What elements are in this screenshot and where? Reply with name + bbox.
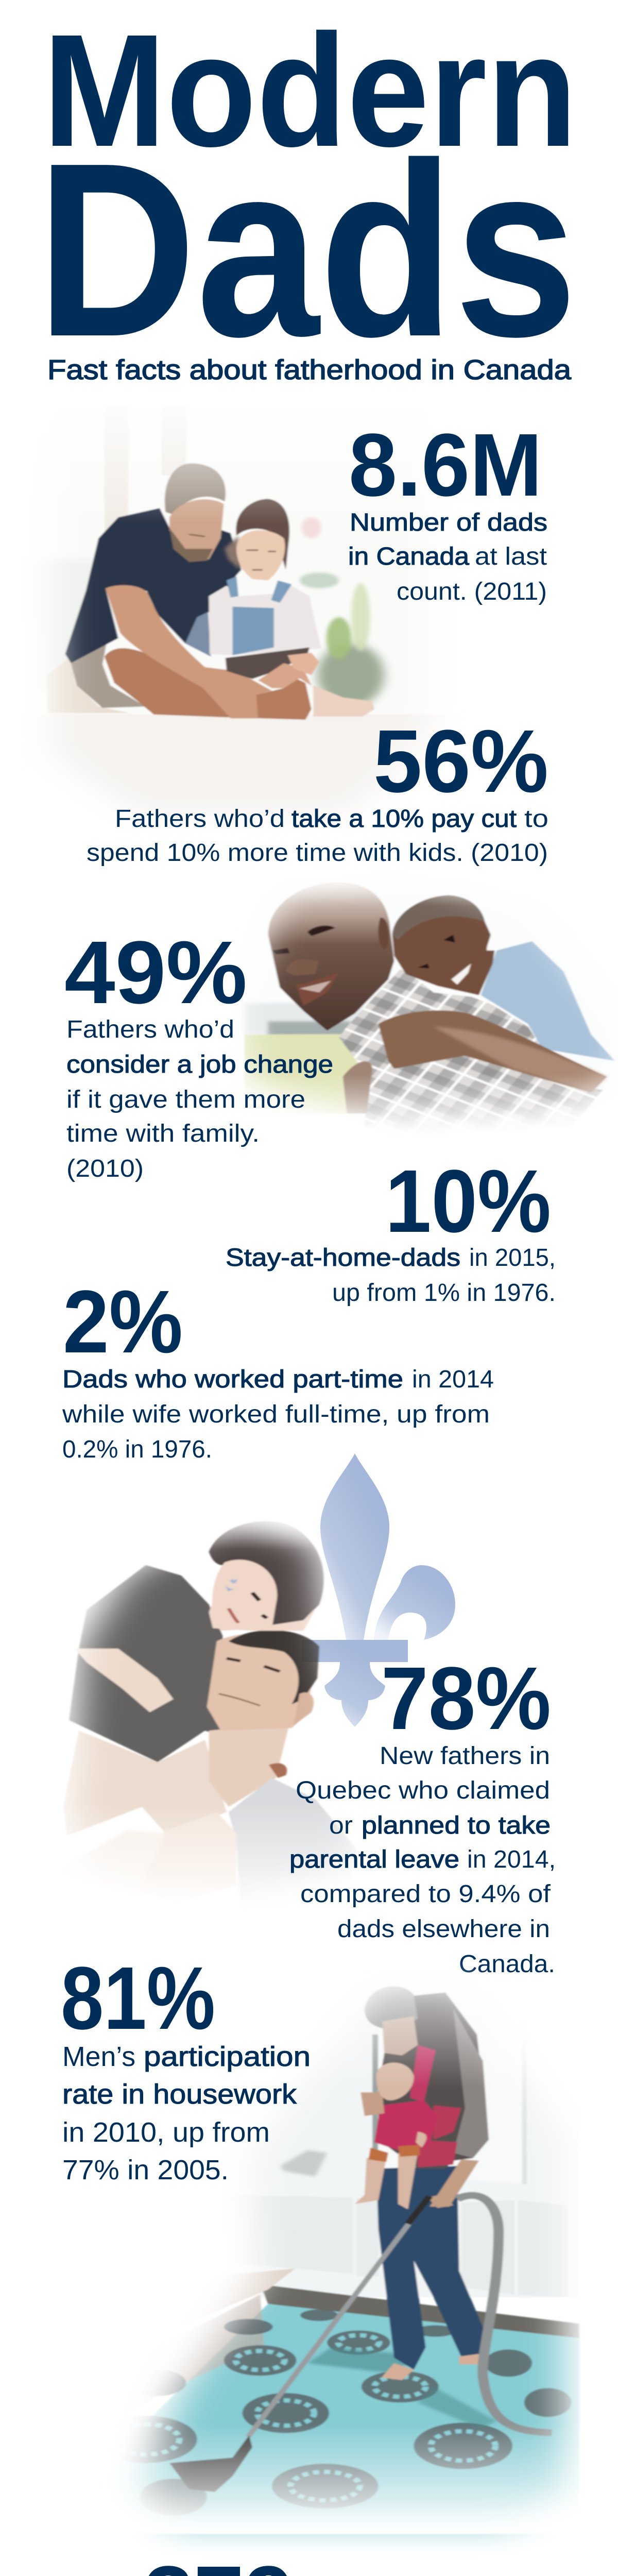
stat: 56% pay cut: 56% (373, 711, 548, 811)
stat: 2% part-time: in 2014 (412, 1366, 494, 1393)
stat: 10% stay-at-home: up from 1% in 1976. (332, 1279, 556, 1307)
stat: 8.6M dads: in Canada (348, 543, 469, 570)
photo: father and daughter with tablet (47, 430, 426, 811)
stat: 78% parental leave: or (329, 1812, 353, 1839)
stat: 8.6M dads: count. (2011) (397, 578, 547, 605)
stat: 49% job change: time with family. (66, 1120, 260, 1147)
stat: 49% job change: Fathers who’d (66, 1016, 234, 1043)
stat: 2% part-time (62, 1272, 494, 1463)
stat: 49% job change: if it gave them more (66, 1086, 305, 1113)
stat: 49% job change: consider a job change (66, 1051, 333, 1078)
stat: 2% part-time: 0.2% in 1976. (62, 1436, 212, 1463)
stat: 78% parental leave: planned to take (362, 1812, 551, 1839)
stat: 10% stay-at-home: Stay-at-home-dads (226, 1244, 460, 1272)
stat: 49% job change: 49% (64, 922, 247, 1022)
stat: 78% parental leave: New fathers in (380, 1742, 550, 1770)
stat: 2% part-time: 2% (63, 1272, 183, 1371)
stat: 56% pay cut: to (524, 805, 548, 833)
stat: 56% pay cut (87, 711, 548, 867)
stat: 78% parental leave: Canada. (459, 1951, 555, 1978)
stat: 78% parental leave (289, 1648, 556, 1978)
stat: 10% stay-at-home: 10% (385, 1151, 551, 1251)
stat: 8.6M dads: 8.6M (349, 415, 542, 515)
stat: 2% part-time: Dads who worked part-time (62, 1366, 403, 1393)
stat: 78% parental leave: 78% (381, 1648, 551, 1748)
title (37, 1, 577, 388)
stat: 81% housework (61, 1948, 311, 2185)
photo: man vacuuming with baby (127, 1962, 580, 2547)
photo: boy on father's shoulders (63, 1521, 355, 1887)
stat: 56% pay cut: spend 10% more time with kids. (2010) (87, 839, 548, 867)
stat: 56% pay cut: Fathers who’d (115, 805, 285, 833)
stat: 81% housework: 81% (61, 1948, 215, 2048)
stat: 81% housework: rate in housework (62, 2079, 297, 2110)
stat: 78% parental leave: in 2014, (467, 1846, 556, 1873)
stat: 10% stay-at-home (226, 1151, 556, 1307)
stat: 8.6M dads (348, 415, 547, 605)
stat: 49% job change (64, 922, 333, 1182)
stat: 81% housework: participation (144, 2041, 311, 2072)
stat: 81% housework: in 2010, up from (62, 2117, 270, 2148)
icon: fleur-de-lis (302, 1453, 455, 1727)
stat: 81% housework: 77% in 2005. (62, 2155, 229, 2185)
stat: 78% parental leave: compared to 9.4% of (300, 1880, 551, 1908)
stat: 78% parental leave: dads elsewhere in (337, 1916, 550, 1943)
stat: 49% job change: (2010) (66, 1155, 144, 1182)
stat: 379 minutes (79, 2547, 555, 2576)
stat: 8.6M dads: Number of dads (350, 509, 547, 536)
stat: 78% parental leave: parental leave (289, 1846, 459, 1873)
stat: 56% pay cut: take a 10% pay cut (291, 805, 517, 833)
subtitle: Fast facts about fatherhood in Canada (47, 354, 572, 385)
stat: 10% stay-at-home: in 2015, (469, 1244, 556, 1272)
stat: 78% parental leave: Quebec who claimed (296, 1777, 550, 1804)
photo: father hugging child (244, 883, 615, 1127)
title: Modern (43, 1, 577, 180)
stat: 8.6M dads: at last (475, 543, 547, 570)
stat: 81% housework: Men’s (62, 2041, 135, 2072)
stat: 2% part-time: while wife worked full-time, up from (62, 1401, 490, 1428)
